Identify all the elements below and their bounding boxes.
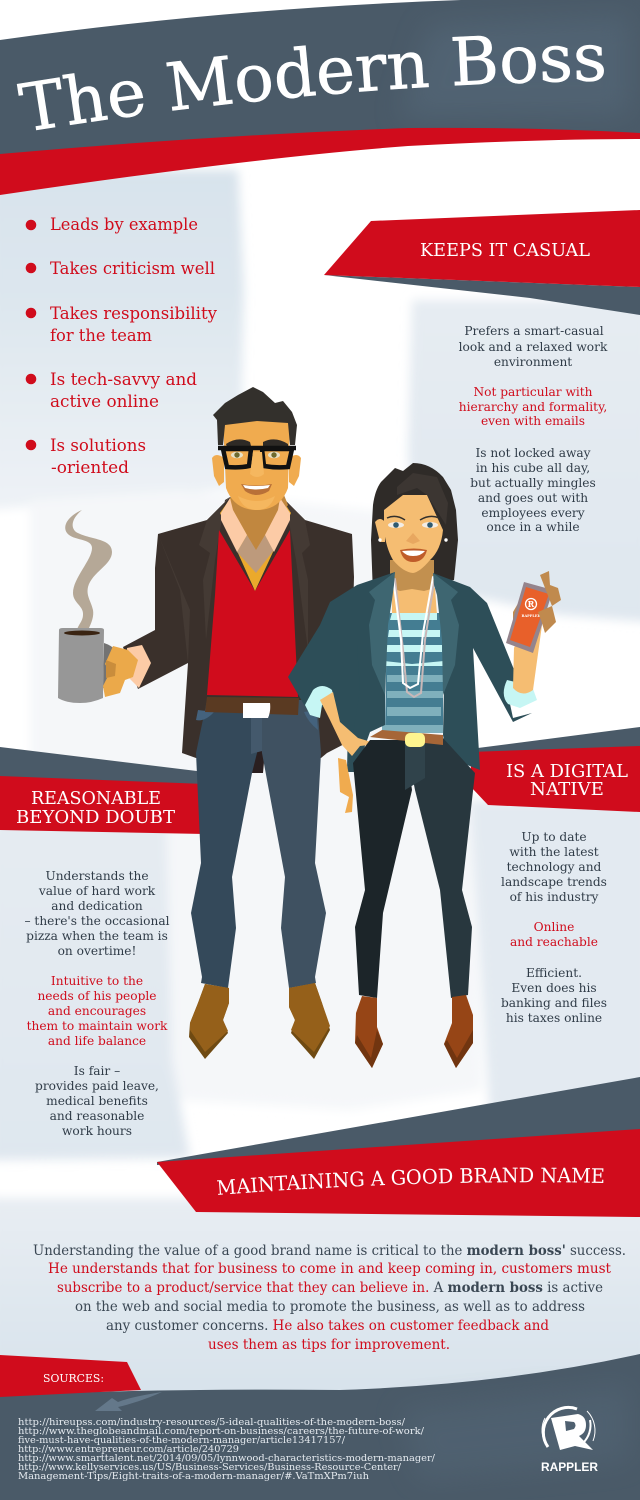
- text block: keeps it casual: Is not locked away: [475, 446, 591, 460]
- text block: reasonable beyond doubt: them to maintain work: [27, 1019, 168, 1033]
- text block: is a digital native: with the latest: [509, 845, 599, 859]
- glasses: [218, 448, 296, 467]
- mouth: [400, 548, 427, 562]
- paragraph: brand name: on the web and social media to promote the business, as well as to address: [75, 1299, 585, 1315]
- paragraph: brand name: Understanding the value of a good brand name is critical to the modern boss' success.: [33, 1243, 626, 1259]
- ribbon: maintaining a good brand name: [157, 1077, 640, 1217]
- text block: is a digital native: [501, 830, 607, 1025]
- text block: reasonable beyond doubt: value of hard work: [38, 884, 156, 898]
- text block: reasonable beyond doubt: and dedication: [51, 899, 143, 913]
- quality: takes criticism well: Takes criticism well: [50, 259, 215, 279]
- quality: tech-savvy: active online: [50, 392, 159, 412]
- ribbon: keeps it casual: KEEPS IT CASUAL: [420, 240, 590, 261]
- text block: keeps it casual: [459, 324, 608, 534]
- nose: [250, 452, 264, 477]
- text block: reasonable beyond doubt: pizza when the team is: [26, 929, 168, 943]
- quality: tech-savvy: [26, 370, 197, 412]
- trousers: [191, 700, 326, 988]
- red swoosh: [0, 128, 640, 195]
- quality: solutions-oriented: [26, 436, 146, 478]
- smartphone: [506, 571, 561, 653]
- sources ribbon: [0, 1355, 141, 1397]
- sources ribbon: SOURCES:: [43, 1372, 104, 1385]
- coffee mug: [58, 628, 120, 703]
- source links: http://hireupss.com/industry-resources/5-ideal-qualities-of-the-modern-boss/: [18, 1417, 406, 1428]
- jacket: [123, 497, 354, 773]
- text block: is a digital native: banking and files: [501, 996, 607, 1010]
- left cuff and hand on hip: [305, 686, 378, 813]
- text block: keeps it casual: environment: [494, 355, 572, 369]
- mouth: [241, 484, 272, 495]
- text block: reasonable beyond doubt: Understands the: [45, 869, 149, 883]
- ribbon: reasonable beyond doubt: BEYOND DOUBT: [16, 807, 175, 828]
- belt: [370, 730, 443, 747]
- text block: keeps it casual: and goes out with: [478, 491, 588, 505]
- smartphone: R: [528, 599, 535, 609]
- list of qualities: [26, 215, 217, 478]
- text block: reasonable beyond doubt: and reasonable: [50, 1109, 144, 1123]
- paragraph: brand name: any customer concerns. He also takes on customer feedback and: [106, 1318, 549, 1334]
- text block: is a digital native: Online: [534, 920, 574, 934]
- text block: reasonable beyond doubt: work hours: [62, 1124, 132, 1138]
- text block: reasonable beyond doubt: on overtime!: [58, 944, 136, 958]
- quality: takes responsibility: [26, 304, 217, 346]
- necklace: [393, 577, 434, 697]
- footer band: [0, 1354, 640, 1500]
- ribbon: keeps it casual: [324, 210, 640, 315]
- jacket: [288, 572, 532, 772]
- text block: is a digital native: Efficient.: [526, 966, 582, 980]
- sweater: [207, 530, 298, 697]
- illustration: the modern boss woman: [288, 463, 561, 1068]
- text block: reasonable beyond doubt: needs of his people: [37, 989, 157, 1003]
- text block: is a digital native: his taxes online: [506, 1011, 602, 1025]
- head: [212, 387, 301, 510]
- source links: [18, 1417, 436, 1482]
- source links: five-must-have-qualities-of-the-modern-manager/article13417157/: [18, 1435, 346, 1446]
- eyebrows and eyes: [387, 516, 439, 528]
- text block: keeps it casual: but actually mingles: [470, 476, 596, 490]
- chest: [392, 588, 437, 615]
- text block: keeps it casual: employees every: [481, 506, 585, 520]
- dark title banner: [0, 0, 640, 175]
- text block: is a digital native: and reachable: [510, 935, 598, 949]
- text block: keeps it casual: even with emails: [481, 414, 585, 428]
- shoes: [355, 995, 473, 1068]
- nose: [406, 533, 420, 544]
- text block: keeps it casual: look and a relaxed work: [459, 340, 608, 354]
- shoes: [189, 983, 330, 1059]
- eyebrows: [226, 439, 251, 447]
- source links: http://www.entrepreneur.com/article/240729: [18, 1444, 239, 1455]
- source links: http://www.smarttalent.net/2014/09/05/lynnwood-characteristics-modern-manager/: [18, 1453, 436, 1464]
- text block: keeps it casual: in his cube all day,: [476, 461, 590, 475]
- quality: solutions-oriented: Is solutions: [50, 436, 146, 456]
- text block: is a digital native: technology and: [507, 860, 602, 874]
- source links: Management-Tips/Eight-traits-of-a-modern-manager/#.VaTmXPm7iuh: [18, 1471, 369, 1482]
- ribbon: is a digital native: IS A DIGITAL: [506, 761, 628, 782]
- text block: reasonable beyond doubt: Intuitive to the: [51, 974, 143, 988]
- text block: keeps it casual: Not particular with: [473, 385, 593, 399]
- text block: is a digital native: Even does his: [511, 981, 597, 995]
- text block: reasonable beyond doubt: provides paid leave,: [35, 1079, 159, 1093]
- paragraph: brand name: He understands that for business to come in and keep coming in, customers must: [48, 1261, 611, 1277]
- neck: [390, 560, 434, 593]
- text block: is a digital native: of his industry: [510, 890, 599, 904]
- text block: is a digital native: landscape trends: [501, 875, 607, 889]
- neck and collar: [220, 490, 291, 591]
- quality: tech-savvy: Is tech-savvy and: [50, 370, 197, 390]
- paragraph: brand name: [33, 1243, 626, 1353]
- text block: keeps it casual: once in a while: [486, 520, 580, 534]
- coffee steam: [65, 510, 112, 630]
- quality: takes responsibility: for the team: [50, 326, 152, 346]
- rappler logo: RAPPLER: [541, 1460, 598, 1474]
- title: The Modern Boss: [16, 36, 604, 130]
- ribbon: maintaining a good brand name: MAINTAINING A GOOD BRAND NAME: [217, 1168, 604, 1195]
- source links: http://www.theglobeandmail.com/report-on-business/careers/the-future-of-work/: [18, 1426, 425, 1437]
- header band: [0, 0, 640, 195]
- paragraph: brand name: subscribe to a product/service that they can believe in. A modern boss is active: [57, 1280, 603, 1296]
- text block: reasonable beyond doubt: and encourages: [48, 1004, 146, 1018]
- text block: reasonable beyond doubt: [24, 869, 170, 1138]
- quality: solutions-oriented: -oriented: [51, 458, 129, 478]
- source links: http://www.kellyservices.us/US/Business-Services/Business-Resource-Center/: [18, 1462, 402, 1473]
- text block: keeps it casual: hierarchy and formality,: [459, 400, 607, 414]
- text block: reasonable beyond doubt: medical benefits: [46, 1094, 148, 1108]
- trousers: [353, 738, 475, 998]
- ribbon: reasonable beyond doubt: [0, 747, 205, 834]
- text block: reasonable beyond doubt: Is fair –: [74, 1064, 120, 1078]
- hand on mug: [103, 645, 151, 697]
- quality: leads by example: Leads by example: [50, 215, 198, 235]
- text block: reasonable beyond doubt: and life balance: [48, 1034, 146, 1048]
- striped top: [382, 613, 444, 733]
- illustration: the modern boss man: [58, 387, 354, 1059]
- paragraph: brand name: uses them as tips for improvement.: [208, 1337, 450, 1353]
- head: [375, 473, 448, 573]
- rappler logo: [541, 1407, 598, 1474]
- text block: is a digital native: Up to date: [521, 830, 587, 844]
- text block: keeps it casual: Prefers a smart-casual: [464, 324, 604, 338]
- ribbon: is a digital native: NATIVE: [530, 779, 604, 800]
- belt: [205, 697, 299, 718]
- quality: takes responsibility: Takes responsibility: [50, 304, 217, 324]
- back hair: [371, 463, 458, 595]
- smartphone: RAPPLER: [522, 614, 541, 618]
- arrow: to sources: [95, 1392, 162, 1411]
- ribbon: is a digital native: [470, 727, 640, 812]
- ribbon: reasonable beyond doubt: REASONABLE: [31, 788, 161, 809]
- eyes: [231, 452, 280, 458]
- earrings: [378, 538, 382, 542]
- text block: reasonable beyond doubt: – there's the occasional: [24, 914, 170, 928]
- right cuff and forearm: [504, 610, 542, 708]
- hair: [213, 387, 297, 445]
